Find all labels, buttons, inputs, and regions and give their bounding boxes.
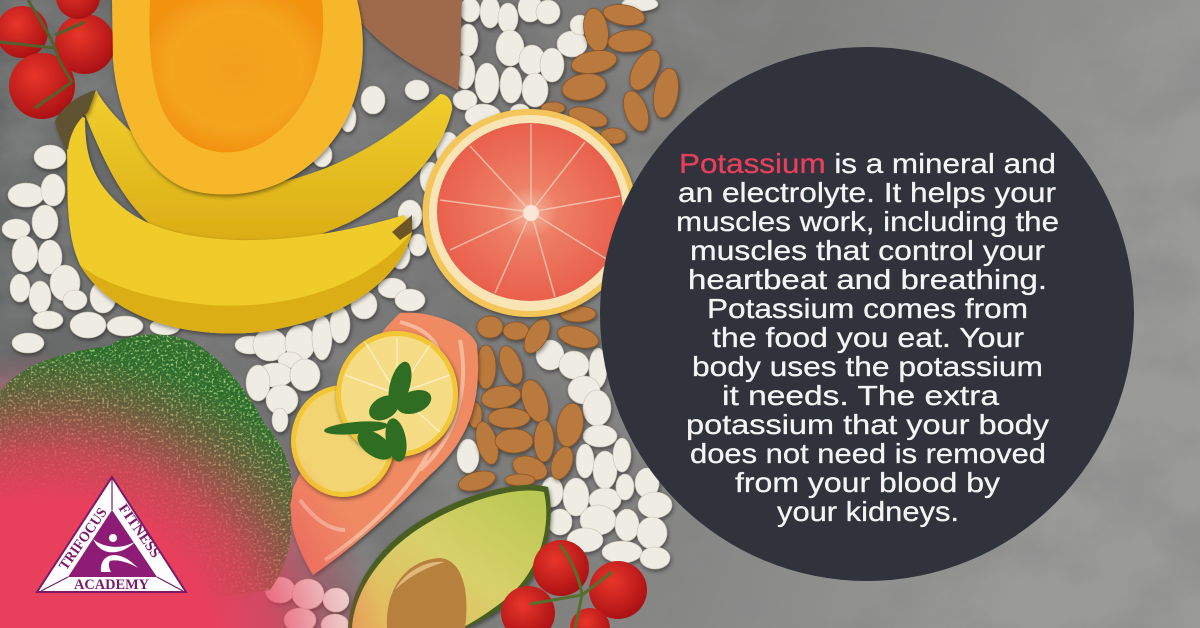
logo text: TRIFOCUS [56, 505, 111, 573]
logo: Trifocus Fitness Academy: FITNESS [115, 501, 163, 561]
parsley [324, 359, 435, 465]
body text: potassium that your body [686, 409, 1049, 440]
body text: from your blood by [735, 467, 1000, 498]
lower banana [55, 90, 412, 333]
lemon slices and parsley [291, 331, 458, 497]
upper banana [84, 90, 452, 251]
body text: body uses the potassium [692, 351, 1043, 382]
almonds [456, 2, 682, 495]
body text: it needs. The extra [722, 380, 1000, 411]
broccoli [0, 335, 292, 628]
body text: does not need is removed [690, 438, 1046, 469]
white beans [2, 0, 672, 628]
logo: Trifocus Fitness Academy [37, 477, 186, 593]
body text: muscles work, including the [676, 206, 1059, 237]
tomatoes top left [0, 0, 115, 119]
pink gradient overlay [0, 300, 420, 628]
body text: Potassium comes from [707, 293, 1028, 324]
dark circle panel [600, 47, 1134, 581]
sweet potato [345, 0, 462, 90]
body text: muscles that control your [690, 235, 1045, 266]
body text: an electrolyte. It helps your [678, 177, 1056, 208]
body text: heartbeat and breathing. [688, 264, 1047, 295]
avocado [348, 485, 551, 628]
logo: Trifocus Fitness Academy: ACADEMY [74, 577, 150, 593]
body text: the food you eat. Your [712, 322, 1024, 353]
body text [676, 148, 1059, 527]
tomatoes bottom [501, 540, 647, 628]
logo figure [93, 534, 138, 572]
pumpkin [112, 0, 363, 194]
grapefruit [422, 109, 636, 317]
salmon steak [290, 313, 478, 575]
body text: your kidneys. [777, 496, 959, 527]
body text: Potassium is a mineral and [679, 148, 1056, 179]
